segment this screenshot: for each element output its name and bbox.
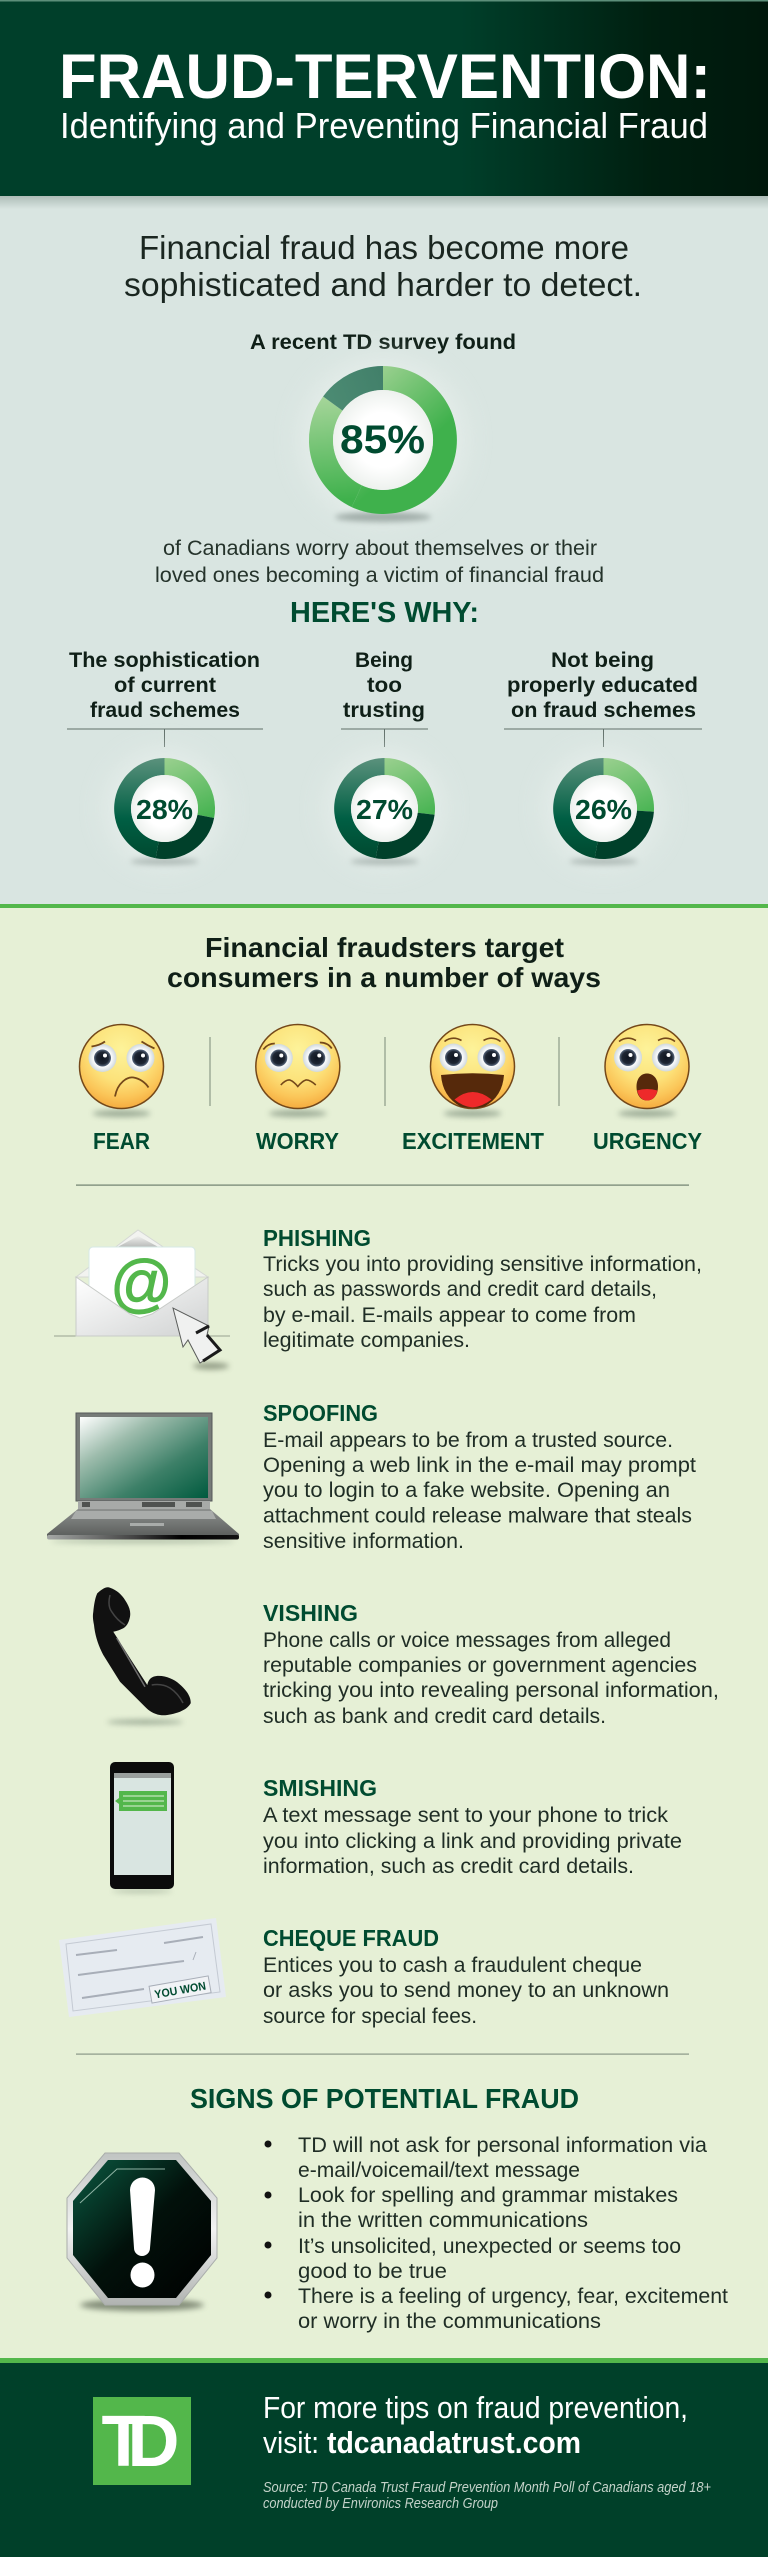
list: signs of fraud: or worry in the communications xyxy=(298,2310,601,2333)
icon: laptop xyxy=(47,1413,239,1544)
emotion labels: WORRY xyxy=(256,1128,339,1154)
text: smishing: A text message sent to your phone to trick xyxy=(263,1804,669,1827)
emoji: urgency xyxy=(605,1024,689,1117)
text: spoofing: attachment could release malware that steals xyxy=(263,1504,692,1528)
text: vishing: tricking you into revealing personal information, xyxy=(263,1679,719,1702)
header banner xyxy=(0,0,768,209)
heading: here's why: HERE'S WHY: xyxy=(290,597,479,629)
text: cheque fraud: Entices you to cash a fraudulent cheque xyxy=(263,1954,642,1977)
donut chart: 28%: 28% xyxy=(136,794,193,825)
list: signs of fraud: e-mail/voicemail/text message xyxy=(298,2159,580,2182)
list: signs of fraud: It’s unsolicited, unexpected or seems too xyxy=(298,2235,681,2258)
title: FRAUD-TERVENTION: xyxy=(59,42,711,112)
text: cheque fraud: or asks you to send money to an unknown xyxy=(263,1979,669,2002)
text: cheque fraud xyxy=(263,1925,669,2028)
text: phishing: PHISHING xyxy=(263,1225,371,1251)
icon: envelope with cursor: @ xyxy=(110,1247,173,1319)
survey result text xyxy=(155,537,604,587)
survey result text: loved ones becoming a victim of financial fraud xyxy=(155,564,604,587)
reason 2: being too trusting: trusting xyxy=(343,699,425,722)
donut chart: 26% xyxy=(544,748,664,868)
text: spoofing: E-mail appears to be from a trusted source. xyxy=(263,1429,673,1452)
text: spoofing: sensitive information. xyxy=(263,1530,464,1553)
survey result text: of Canadians worry about themselves or their xyxy=(163,537,597,560)
list: signs of fraud: good to be true xyxy=(298,2260,447,2283)
text: smishing: information, such as credit card details. xyxy=(263,1855,634,1878)
list: signs of fraud: Look for spelling and grammar mistakes xyxy=(298,2184,678,2207)
icon: envelope with cursor xyxy=(54,1230,230,1370)
subtitle: Identifying and Preventing Financial Fraud xyxy=(60,105,708,146)
text: vishing xyxy=(263,1600,719,1728)
text: smishing xyxy=(263,1775,682,1878)
footer xyxy=(0,2358,768,2557)
emotion labels: EXCITEMENT xyxy=(402,1128,544,1154)
emotion labels: FEAR xyxy=(93,1128,150,1154)
source note: conducted by Environics Research Group xyxy=(263,2496,498,2512)
text: spoofing: Opening a web link in the e-mail may prompt xyxy=(263,1454,696,1477)
icon: warning stop sign xyxy=(67,2153,217,2311)
reason 1: sophistication of schemes: of current xyxy=(114,674,216,697)
emotion labels: URGENCY xyxy=(593,1128,702,1154)
reason 1: sophistication of schemes: The sophistication xyxy=(69,649,260,672)
intro statement: sophisticated and harder to detect. xyxy=(124,266,642,303)
icon: cheque xyxy=(59,1918,226,2017)
text: smishing: SMISHING xyxy=(263,1775,377,1801)
donut chart: 28% xyxy=(104,748,224,868)
source note: Source: TD Canada Trust Fraud Prevention Month Poll of Canadians aged 18+ xyxy=(263,2480,711,2496)
list: signs of fraud xyxy=(264,2134,728,2333)
reason 2: being too trusting: too xyxy=(367,674,402,697)
call to action xyxy=(263,2390,688,2460)
reason 3: not properly educated: properly educated xyxy=(507,674,698,697)
source note xyxy=(263,2480,711,2512)
reason 3: not properly educated: Not being xyxy=(551,649,654,672)
emoji: worry xyxy=(256,1024,340,1117)
survey label: A recent TD survey found xyxy=(250,331,516,354)
donut chart: 26%: 26% xyxy=(575,794,632,825)
divider xyxy=(210,1037,559,1106)
reason 3: not properly educated xyxy=(504,649,702,868)
emoji: fear xyxy=(80,1024,164,1117)
text: phishing: legitimate companies. xyxy=(263,1329,470,1352)
donut chart: 27%: 27% xyxy=(356,794,413,825)
donut chart: 85% xyxy=(299,356,467,524)
reason 3: not properly educated: on fraud schemes xyxy=(511,699,696,722)
text: spoofing xyxy=(263,1400,696,1553)
text: cheque fraud: source for special fees. xyxy=(263,2005,477,2028)
text: cheque fraud: CHEQUE FRAUD xyxy=(263,1925,439,1951)
intro statement: Financial fraud has become more xyxy=(139,229,629,266)
text: spoofing: SPOOFING xyxy=(263,1400,378,1426)
text: vishing: Phone calls or voice messages from alleged xyxy=(263,1629,671,1652)
heading: fraudsters target consumers: consumers in a number of ways xyxy=(167,962,601,993)
list: signs of fraud: in the written communications xyxy=(298,2209,588,2232)
call to action: visit: xyxy=(263,2425,319,2460)
text: smishing: you into clicking a link and providing private xyxy=(263,1830,682,1853)
call to action: For more tips on fraud prevention, xyxy=(263,2390,688,2425)
call to action: tdcanadatrust.com xyxy=(327,2425,581,2460)
emoji: excitement xyxy=(430,1024,514,1117)
text: vishing: VISHING xyxy=(263,1600,358,1626)
donut chart: 27% xyxy=(324,748,444,868)
icon: smartphone with text bubble xyxy=(110,1762,174,1893)
text: phishing: such as passwords and credit card details, xyxy=(263,1278,657,1301)
text: spoofing: you to login to a fake website. Opening an xyxy=(263,1479,670,1502)
TD logo: TD xyxy=(102,2402,179,2482)
donut chart: 85%: 85% xyxy=(340,418,425,462)
list: signs of fraud: TD will not ask for personal information via xyxy=(298,2134,707,2157)
intro statement xyxy=(124,229,642,303)
list: signs of fraud: There is a feeling of urgency, fear, excitement xyxy=(298,2285,728,2308)
text: phishing: by e-mail. E-mails appear to come from xyxy=(263,1304,636,1327)
icon: telephone handset xyxy=(93,1587,191,1724)
reason 2: being too trusting: Being xyxy=(355,649,413,672)
text: vishing: such as bank and credit card details. xyxy=(263,1705,606,1728)
heading: fraudsters target consumers xyxy=(167,932,601,993)
reason 2: being too trusting xyxy=(324,649,444,868)
emotion labels xyxy=(93,1128,702,1154)
reason 1: sophistication of schemes xyxy=(67,649,263,868)
heading: fraudsters target consumers: Financial fraudsters target xyxy=(205,932,564,963)
text: vishing: reputable companies or government agencies xyxy=(263,1654,697,1677)
icon: cheque: YOU WON xyxy=(154,1981,207,2001)
heading: signs of potential fraud: SIGNS OF POTENTIAL FRAUD xyxy=(190,2083,579,2114)
reason 1: sophistication of schemes: fraud schemes xyxy=(90,699,240,722)
text: phishing xyxy=(263,1225,702,1352)
text: phishing: Tricks you into providing sensitive information, xyxy=(263,1253,702,1276)
